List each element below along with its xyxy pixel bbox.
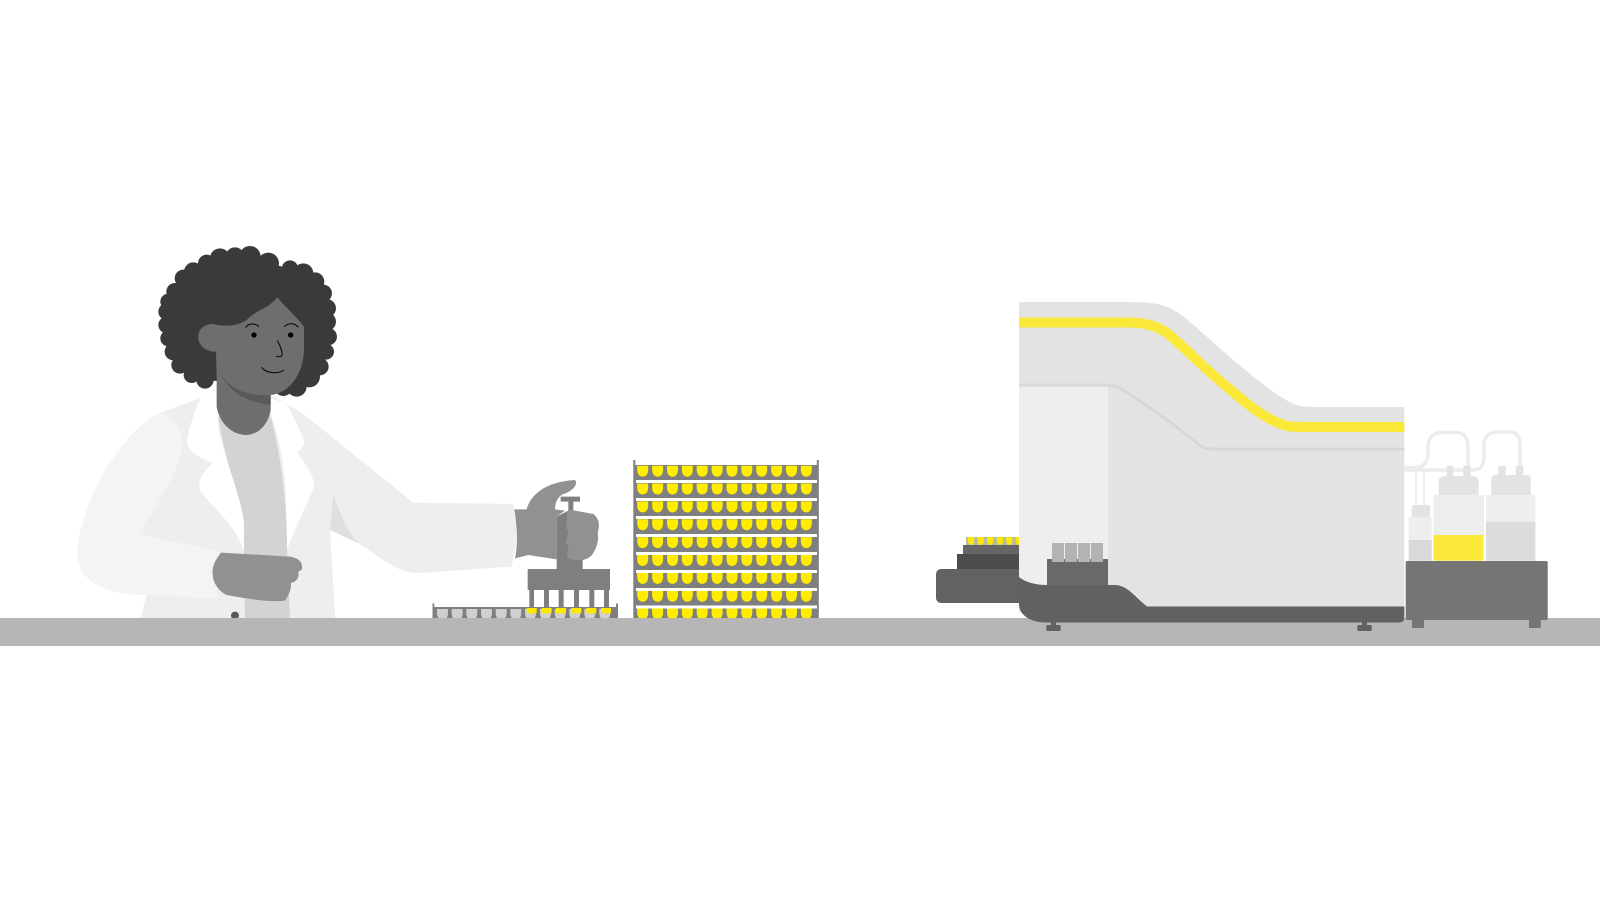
tray yellow wells xyxy=(966,537,1022,545)
pipette tips xyxy=(529,590,609,609)
face xyxy=(198,297,304,395)
hair xyxy=(158,246,337,397)
empty wells xyxy=(437,609,610,620)
left loading tray xyxy=(936,537,1026,603)
machine body xyxy=(1019,302,1404,612)
machine feet xyxy=(1046,620,1372,631)
middle bottle with yellow reagent xyxy=(1434,466,1484,561)
right bottle xyxy=(1486,466,1535,561)
analyser xyxy=(1019,302,1404,631)
pipette head and shaft xyxy=(528,511,610,590)
lower hand xyxy=(213,553,302,601)
rack frame xyxy=(633,460,819,618)
tray upper step xyxy=(963,545,1023,555)
rack shelves xyxy=(636,480,817,608)
bottle tray feet xyxy=(1412,618,1541,628)
tubing xyxy=(1404,432,1520,470)
plunger xyxy=(561,497,580,513)
small bottle tubes xyxy=(1416,471,1424,505)
right lapel xyxy=(270,398,314,550)
bottle tray xyxy=(1406,561,1548,620)
sample block vials xyxy=(1052,543,1103,562)
chin shadow xyxy=(220,373,271,405)
multichannel pipette xyxy=(514,480,611,613)
small bottle xyxy=(1409,505,1432,561)
rack wells xyxy=(637,466,812,477)
sample rack xyxy=(633,460,819,620)
machine base xyxy=(1019,577,1404,622)
sample tray xyxy=(432,604,618,620)
scientist xyxy=(77,246,516,620)
counter xyxy=(0,618,1600,646)
reagent bottles xyxy=(1404,432,1548,628)
neck xyxy=(217,370,271,435)
facial features xyxy=(246,324,298,373)
front panel xyxy=(1019,385,1108,600)
gloved hand xyxy=(514,480,599,560)
sample block xyxy=(1047,559,1108,585)
coat button xyxy=(231,612,239,620)
coat body and outstretched arm xyxy=(138,397,516,620)
left sleeve xyxy=(77,413,220,598)
yellow stripe xyxy=(1019,322,1404,427)
shirt xyxy=(218,410,290,620)
tip yellow samples xyxy=(527,608,611,613)
arm shadow xyxy=(330,493,358,543)
panel seam xyxy=(1019,385,1404,449)
tray middle step xyxy=(957,554,1023,570)
left lapel xyxy=(187,393,244,552)
tray base xyxy=(936,569,1026,603)
